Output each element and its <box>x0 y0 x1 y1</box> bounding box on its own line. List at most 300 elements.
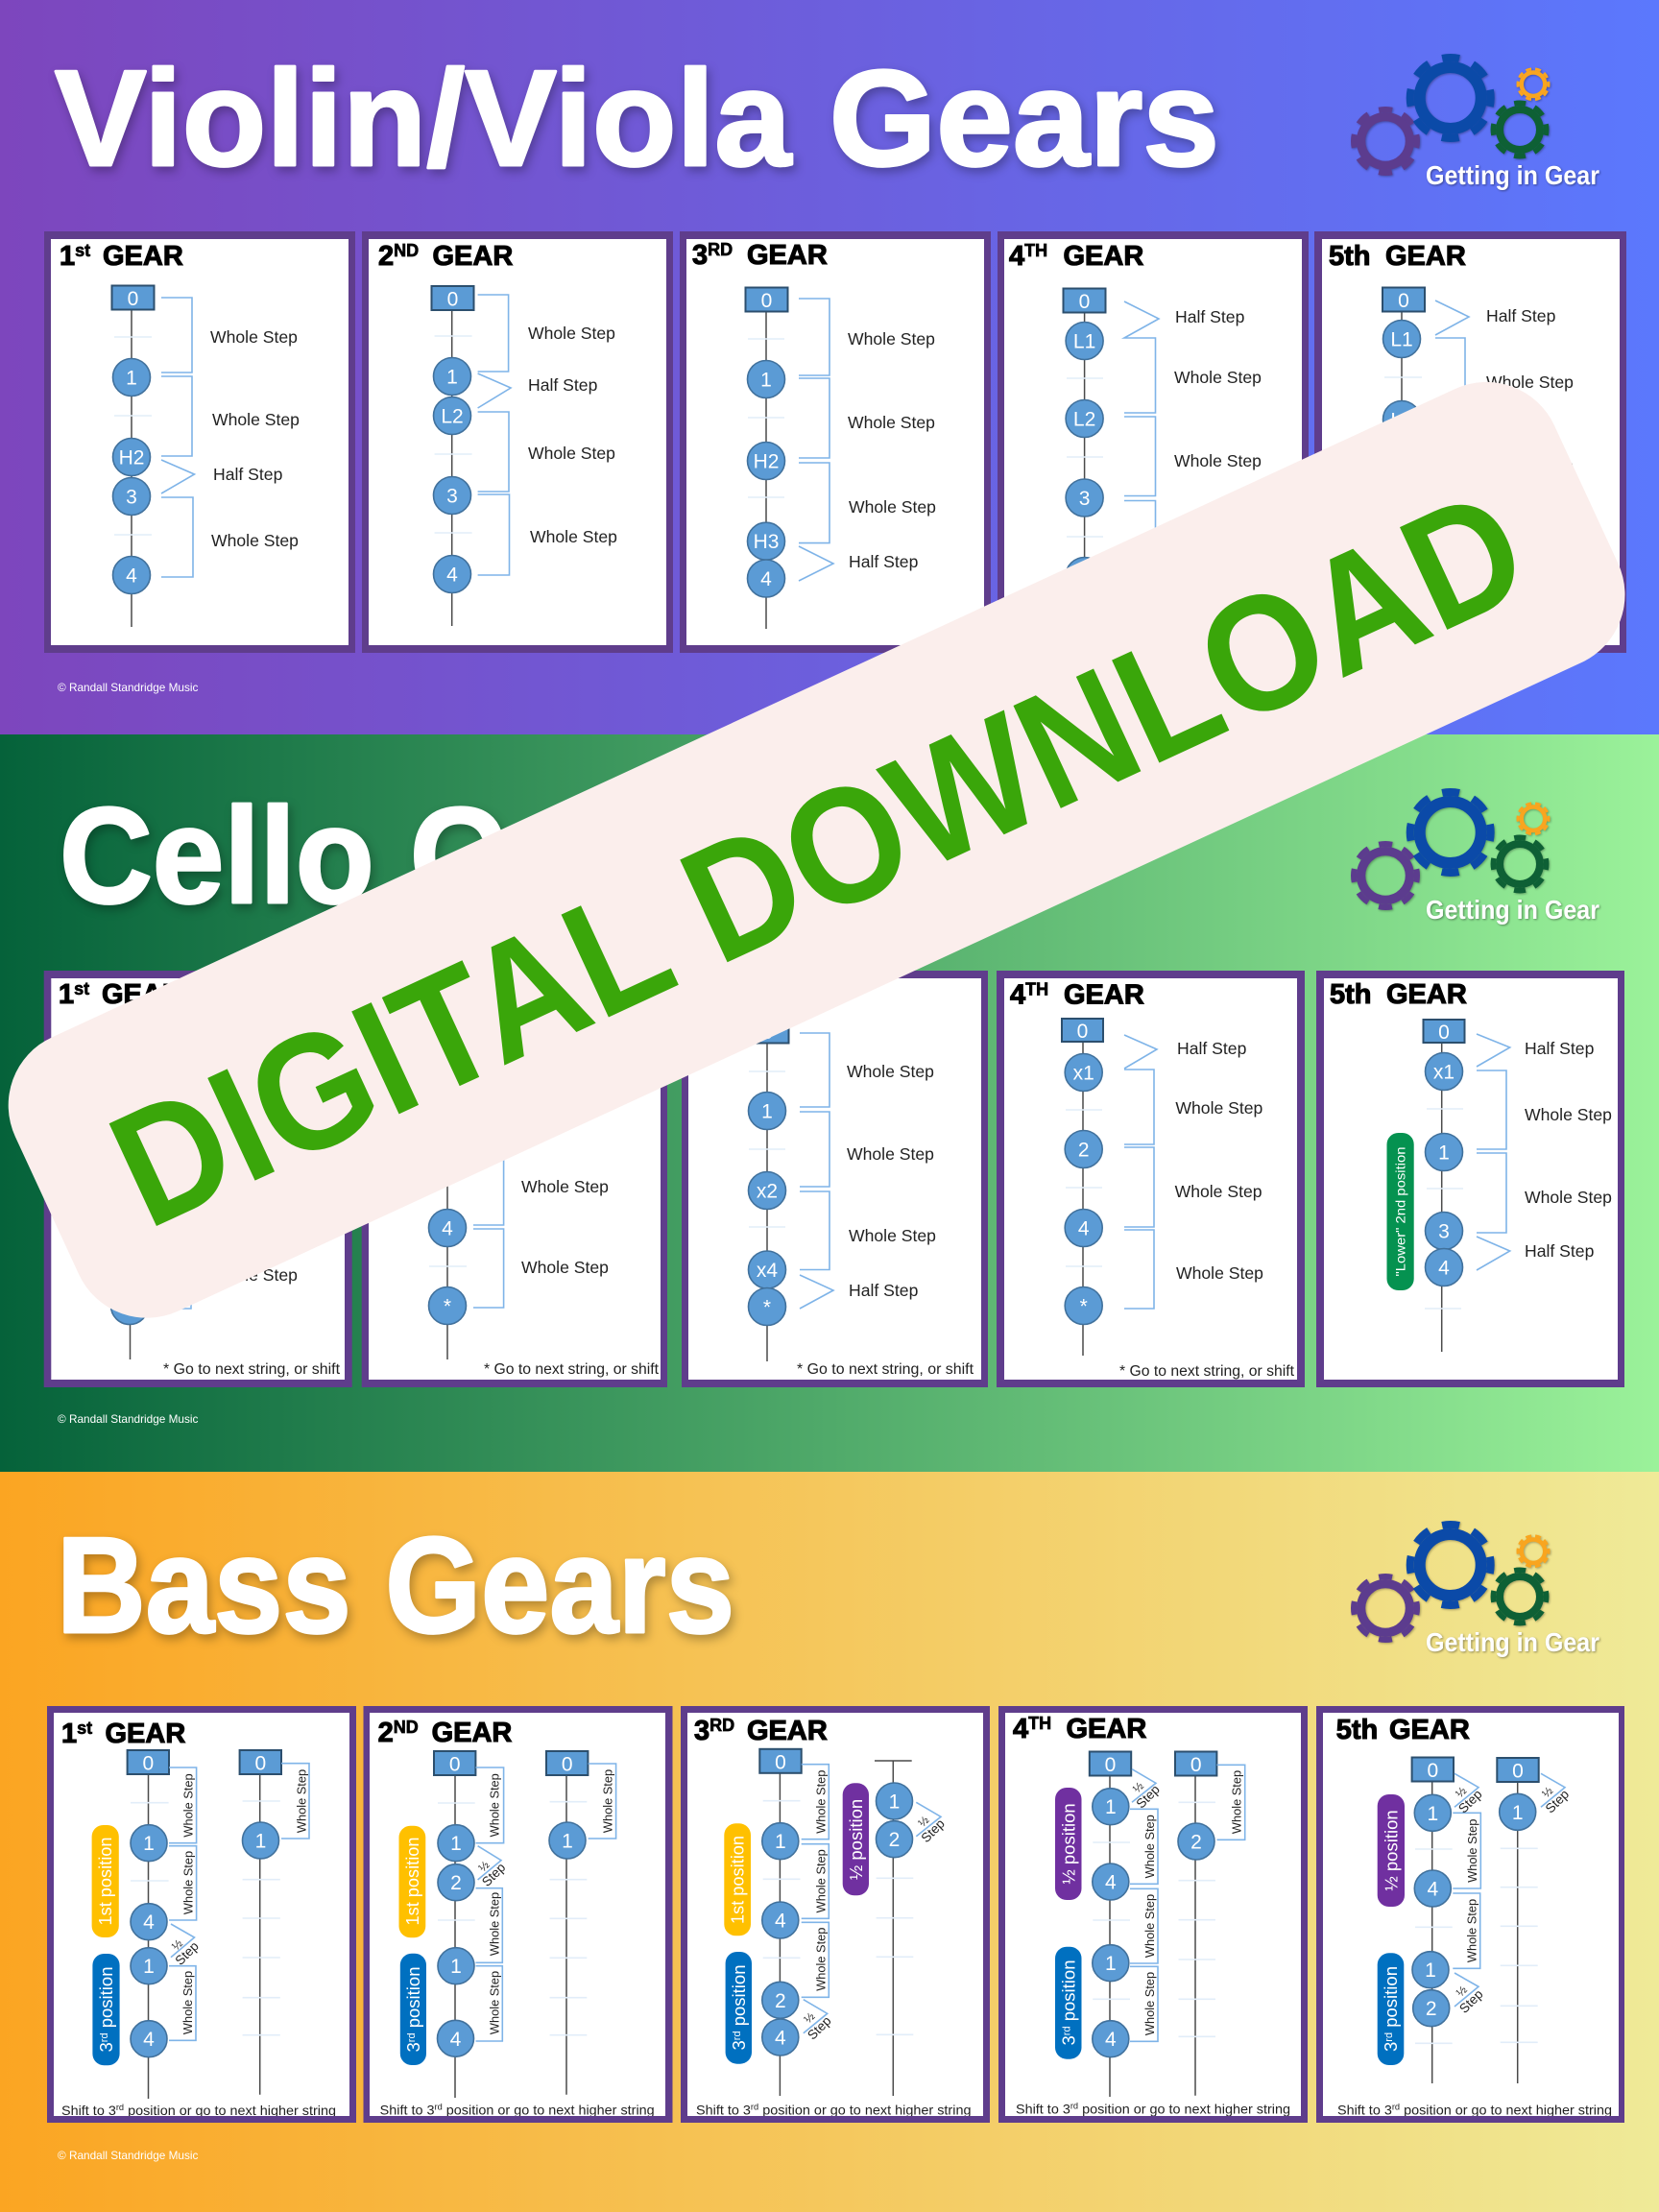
step labels: Whole Step <box>1176 1263 1263 1283</box>
right step label: Whole Step <box>1230 1770 1244 1834</box>
step labels: Whole Step <box>521 1258 609 1277</box>
string diagram: H2 <box>119 447 144 469</box>
right string diagram: 0 <box>1190 1754 1202 1776</box>
string diagram: 3 <box>1079 488 1090 510</box>
string diagram <box>747 1020 789 1361</box>
left string diagram: 4 <box>1105 2029 1117 2051</box>
step labels: Whole Step <box>1525 1188 1612 1207</box>
left string diagram: 1 <box>450 1833 462 1855</box>
pill: half position <box>1055 1788 1081 1900</box>
pill: 3rd position: 3 <box>403 2042 423 2052</box>
right string diagram <box>546 1751 588 2095</box>
heading: 3 <box>694 1716 709 1746</box>
panel: bass 5th gear <box>1316 1706 1624 2123</box>
logo: Getting in Gear (violin): Getting in Gear <box>1426 160 1599 190</box>
panel: violin 2nd gear <box>362 231 673 653</box>
pill: 3rd position <box>1055 1947 1081 2059</box>
pill: 3rd position: position <box>1058 1960 1078 2026</box>
step brackets <box>799 299 833 581</box>
string diagram: * <box>444 1296 451 1317</box>
pill: 3rd position: rd <box>406 2032 418 2042</box>
left step labels: Whole Step <box>1464 1899 1479 1962</box>
heading: 4 <box>1013 1714 1028 1744</box>
right step label: Step <box>1543 1787 1572 1816</box>
string diagram: 3 <box>446 486 458 507</box>
heading: 4 <box>1010 980 1025 1011</box>
section: cello background <box>0 734 1659 1472</box>
left string diagram: 4 <box>775 1911 786 1932</box>
left string diagram: 1 <box>1105 1796 1117 1818</box>
pill: 3rd position: rd <box>732 2031 743 2040</box>
footnote: * Go to next string, or shift <box>797 1361 974 1378</box>
left step labels <box>802 1770 834 2043</box>
left string diagram <box>759 1749 802 2096</box>
string diagram <box>111 1032 148 1359</box>
footer note: Shift to 3 <box>61 2103 114 2118</box>
step labels <box>847 1062 936 1300</box>
string diagram: 0 <box>762 1022 773 1044</box>
heading: GEAR <box>432 1718 512 1748</box>
string diagram: 4 <box>1438 1258 1450 1279</box>
heading: GEAR <box>1386 979 1467 1010</box>
right string diagram: 1 <box>562 1830 573 1853</box>
step labels: Half Step <box>1175 307 1245 326</box>
heading: RD <box>709 1716 734 1735</box>
left step labels <box>169 1773 202 2034</box>
string diagram: 4 <box>442 1217 453 1240</box>
left string diagram: 0 <box>449 1753 461 1776</box>
heading: 5th <box>1330 979 1371 1010</box>
heading: 5th <box>1329 241 1371 272</box>
string diagram: 4 <box>1078 1217 1090 1240</box>
right half-step bracket <box>1541 1773 1565 1807</box>
footer note: rd <box>1070 2102 1078 2111</box>
string diagram: L2 <box>1073 409 1095 430</box>
pill: 3rd position: 3 <box>729 2040 749 2050</box>
left step labels: Whole Step <box>488 1773 502 1837</box>
step labels: Whole Step <box>847 1144 934 1164</box>
step labels: Whole Step <box>528 324 615 343</box>
footnote: * Go to next string, or shift <box>1119 1363 1295 1380</box>
string diagram: 1 <box>1438 1142 1450 1164</box>
logo: Getting in Gear (bass): Getting in Gear <box>1426 1627 1599 1657</box>
step labels: Whole Step <box>1486 373 1574 392</box>
string diagram: * <box>763 1296 771 1319</box>
string diagram: 0 <box>1079 291 1090 313</box>
step brackets <box>1435 301 1469 413</box>
step labels: Whole Step <box>1525 1105 1612 1124</box>
left string diagram: 4 <box>143 2029 155 2051</box>
right string diagram: 0 <box>562 1753 573 1776</box>
right step label: Whole Step <box>601 1769 615 1833</box>
step labels: Half Step <box>1486 306 1556 325</box>
pill: 3rd position: 3 <box>1381 2042 1401 2052</box>
string diagram: * <box>1080 1296 1088 1317</box>
pill: half position: ½ position <box>1058 1803 1078 1885</box>
pill: 3rd position <box>92 1954 120 2065</box>
left step labels <box>476 1773 508 2034</box>
string diagram <box>428 1032 467 1359</box>
left step labels: ½ <box>476 1859 492 1874</box>
panel: cello 4th gear <box>997 971 1305 1387</box>
step brackets <box>1124 301 1159 579</box>
right half-step bracket <box>916 1802 941 1837</box>
footer note: rd <box>116 2103 124 2112</box>
left string diagram <box>434 1751 475 2098</box>
pill: half position: ½ position <box>1381 1810 1401 1891</box>
logo: Getting in Gear (cello): Getting in Gear <box>1426 895 1599 925</box>
footer note: position or go to next higher string <box>124 2103 336 2118</box>
left string diagram <box>1090 1751 1131 2097</box>
footer note: position or go to next higher string <box>758 2103 971 2118</box>
left step labels <box>1453 1784 1486 2016</box>
right bracket <box>281 1764 309 1839</box>
pill: half position <box>843 1783 869 1895</box>
step brackets <box>161 1231 191 1309</box>
copyright: bass: © Randall Standridge Music <box>58 2149 198 2162</box>
heading: st <box>77 1719 92 1738</box>
pill: 3rd position <box>726 1952 752 2064</box>
pill: 3rd position: rd <box>1383 2032 1395 2042</box>
heading: GEAR <box>1064 980 1144 1011</box>
step labels: Whole Step <box>1174 451 1262 470</box>
right string diagram: 0 <box>1512 1761 1524 1782</box>
step labels: Half Step <box>849 552 919 571</box>
heading: 4 <box>1009 241 1024 272</box>
heading: GEAR <box>102 979 182 1010</box>
right string diagram: 1 <box>889 1791 900 1813</box>
step labels: Whole Step <box>1175 1182 1262 1201</box>
heading: GEAR <box>103 241 183 272</box>
step labels: Whole Step <box>1486 456 1574 475</box>
left step labels: Step <box>172 1938 202 1968</box>
heading: GEAR <box>432 241 513 272</box>
right string diagram: 1 <box>1512 1802 1524 1824</box>
step labels: Whole Step <box>1174 368 1262 387</box>
left step labels: Step <box>479 1860 508 1889</box>
left step labels: Whole Step <box>813 1849 828 1912</box>
step labels <box>1525 1039 1612 1261</box>
left step labels: ½ <box>1454 1984 1470 1999</box>
heading: GEAR <box>1066 1714 1146 1744</box>
pill: 3rd position: position <box>1381 1966 1401 2032</box>
left string diagram: 1 <box>1105 1953 1117 1975</box>
left step labels: Whole Step <box>487 1971 501 2034</box>
step labels <box>1174 307 1262 551</box>
right step label: Whole Step <box>294 1769 309 1833</box>
pill: 3rd position: 3 <box>1058 2035 1078 2045</box>
heading: GEAR <box>106 1719 185 1749</box>
string diagram: 0 <box>1438 1022 1450 1044</box>
string diagram <box>1064 288 1106 629</box>
left string diagram: 2 <box>1426 1998 1437 2020</box>
string diagram: 4 <box>126 565 137 588</box>
left brackets <box>1453 1773 1480 2007</box>
string diagram: 1 <box>761 1100 773 1123</box>
logo: Getting in Gear (violin) <box>1354 58 1599 190</box>
string diagram: L1 <box>1073 330 1095 353</box>
section: bass background <box>0 1472 1659 2212</box>
step labels: Half Step <box>213 465 283 484</box>
string diagram: L2 <box>1390 409 1413 432</box>
left step labels: ½ <box>1453 1784 1469 1800</box>
step brackets <box>1477 1034 1510 1270</box>
pill: 3rd position: rd <box>99 2032 110 2042</box>
left step labels: Step <box>1133 1782 1163 1812</box>
string diagram: * <box>126 1296 133 1317</box>
left step labels: Step <box>1455 1787 1485 1816</box>
step labels: Whole Step <box>1174 532 1262 551</box>
string diagram: 0 <box>1077 1021 1088 1043</box>
left step labels: ½ <box>169 1936 185 1953</box>
title: Bass Gears: Bass Gears <box>57 1509 734 1662</box>
right string diagram <box>1175 1751 1216 2096</box>
left string diagram: 1 <box>1425 1960 1436 1982</box>
right string diagram <box>875 1761 913 2096</box>
step labels <box>528 324 617 546</box>
heading: TH <box>1025 980 1048 999</box>
right string diagram: 0 <box>254 1753 266 1774</box>
left step labels: Step <box>805 2013 834 2043</box>
panel: cello 3rd gear <box>682 971 988 1387</box>
step labels: Whole Step <box>847 1062 934 1081</box>
left step labels: Whole Step <box>487 1892 501 1956</box>
left step labels: Whole Step <box>181 1773 196 1838</box>
right bracket <box>589 1764 616 1839</box>
string diagram: x2 <box>757 1181 778 1202</box>
footer note: Shift to 3 <box>1337 2103 1390 2118</box>
footer note: Shift to 3 <box>696 2103 749 2118</box>
panel: violin 1st gear <box>44 231 355 653</box>
heading: TH <box>1024 241 1047 260</box>
heading: st <box>74 979 89 998</box>
left step labels: Whole Step <box>180 1971 195 2034</box>
string diagram: 0 <box>1398 290 1409 312</box>
left string diagram: 2 <box>450 1872 462 1894</box>
left string diagram: 1 <box>143 1956 155 1978</box>
left step labels: Whole Step <box>1142 1972 1157 2035</box>
left string diagram: 0 <box>1105 1754 1116 1776</box>
string diagram: 4 <box>446 565 458 586</box>
step labels: Half Step <box>1177 1039 1247 1058</box>
logo: Getting in Gear (cello) <box>1354 792 1599 925</box>
string diagram: x4 <box>757 1260 778 1282</box>
step labels <box>848 329 936 571</box>
step labels: Half Step <box>528 375 598 395</box>
step labels: Whole Step <box>521 1177 609 1196</box>
right string diagram <box>1497 1758 1539 2083</box>
right string diagram: 1 <box>255 1830 266 1853</box>
heading: st <box>75 241 90 260</box>
string diagram: 3 <box>126 486 137 509</box>
string diagram: x1 <box>1433 1062 1455 1083</box>
heading: TH <box>1028 1714 1051 1733</box>
pill: 1st position: 1st position <box>402 1838 422 1926</box>
step brackets <box>1124 1035 1157 1309</box>
footer note: Shift to 3 <box>380 2103 433 2118</box>
step labels: Whole Step <box>528 444 615 463</box>
footer note: rd <box>1392 2103 1400 2112</box>
left step labels: Whole Step <box>813 1928 828 1991</box>
right step label: ½ <box>916 1814 931 1830</box>
pill: 1st position: 1st position <box>95 1838 115 1926</box>
left brackets <box>802 1765 829 2033</box>
pill: 3rd position: 3 <box>96 2042 116 2052</box>
left string diagram: 4 <box>450 2029 462 2051</box>
left step labels: ½ <box>1130 1779 1146 1795</box>
step labels: Half Step <box>1525 1039 1595 1058</box>
step labels <box>210 327 300 550</box>
right step label: Step <box>918 1816 948 1845</box>
step labels: Half Step <box>849 1281 919 1300</box>
string diagram: 3 <box>1438 1221 1450 1242</box>
step brackets <box>473 1148 504 1308</box>
right string diagram: 2 <box>1190 1832 1202 1853</box>
left step labels: Whole Step <box>181 1851 196 1914</box>
step labels <box>521 1177 609 1277</box>
heading: 2 <box>378 1718 394 1748</box>
left brackets <box>476 1767 504 2041</box>
heading: GEAR <box>1385 241 1466 272</box>
footer note: position or go to next higher string <box>1078 2102 1290 2117</box>
pill: 3rd position: rd <box>1061 2026 1072 2035</box>
heading: 1 <box>59 979 74 1010</box>
right string diagram: 2 <box>889 1829 900 1851</box>
banner text: DIGITAL DOWNLOAD <box>85 454 1551 1262</box>
step labels: Whole Step <box>212 410 300 429</box>
left string diagram: 1 <box>1427 1803 1438 1825</box>
string diagram: 1 <box>760 369 772 392</box>
step brackets <box>161 298 194 577</box>
string diagram: 4 <box>760 568 772 590</box>
string diagram: 1 <box>446 367 458 388</box>
heading: 1 <box>60 241 75 272</box>
pill: 1st position: 1st position <box>728 1836 748 1924</box>
string diagram: 1 <box>126 367 137 390</box>
string diagram: 4 <box>1079 566 1091 588</box>
pill: 1st position <box>399 1826 425 1937</box>
pill: 3rd position: position <box>729 1965 749 2031</box>
string diagram <box>432 286 474 626</box>
pill: half position <box>1378 1794 1405 1907</box>
step labels: Whole Step <box>1175 1098 1263 1118</box>
step labels: Half Step <box>1525 1241 1595 1261</box>
pill: 3rd position <box>400 1954 426 2065</box>
pill: 3rd position: position <box>96 1967 116 2032</box>
left string diagram: 0 <box>1427 1760 1438 1782</box>
string diagram: L1 <box>1390 328 1413 351</box>
step labels: Whole Step <box>210 327 298 347</box>
section: violin/viola background <box>0 0 1659 734</box>
step labels: Whole Step <box>848 329 935 349</box>
left string diagram: 4 <box>775 2028 786 2049</box>
left string diagram: 0 <box>142 1753 154 1774</box>
left string diagram <box>1412 1757 1454 2083</box>
left string diagram: 4 <box>143 1911 155 1934</box>
heading: GEAR <box>747 240 828 271</box>
footer note: position or go to next higher string <box>1400 2103 1612 2118</box>
string diagram: 0 <box>761 290 772 312</box>
right bracket <box>1217 1765 1245 1839</box>
string diagram <box>111 286 154 627</box>
panel: violin 4th gear <box>998 231 1309 653</box>
step labels: Whole Step <box>530 527 617 546</box>
string diagram <box>745 288 787 629</box>
pill: 3rd position <box>1378 1953 1404 2065</box>
heading: ND <box>394 241 419 260</box>
panel: cello 1st gear <box>44 971 352 1387</box>
string diagram: x1 <box>1073 1062 1094 1085</box>
left step labels: Whole Step <box>1465 1819 1479 1883</box>
position pill <box>1386 1133 1414 1290</box>
string diagram <box>1062 1019 1103 1356</box>
pill: 1st position <box>724 1823 751 1936</box>
title: Violin/Viola Gears: Violin/Viola Gears <box>55 42 1219 195</box>
logo: Getting in Gear (bass) <box>1354 1525 1599 1657</box>
heading: 2 <box>378 241 394 272</box>
right step label: ½ <box>1539 1784 1555 1800</box>
heading: 3 <box>692 240 708 271</box>
pill: 3rd position: position <box>403 1967 423 2032</box>
footer note: position or go to next higher string <box>443 2103 655 2118</box>
right string diagram <box>240 1750 281 2095</box>
footnote: * Go to next string, or shift <box>163 1361 341 1378</box>
left step labels: Whole Step <box>1142 1894 1157 1958</box>
step labels: Whole Step <box>848 413 935 432</box>
left brackets <box>169 1767 197 2040</box>
panel: bass 3rd gear <box>681 1706 990 2123</box>
panel: violin 3rd gear <box>680 231 991 653</box>
left string diagram: 4 <box>1105 1872 1117 1893</box>
step brackets <box>478 295 511 575</box>
string diagram: L2 <box>441 405 464 428</box>
panel: cello 5th gear <box>1316 971 1624 1387</box>
left string diagram: 1 <box>775 1831 786 1853</box>
step labels: Whole Step <box>849 497 936 517</box>
step labels: Whole Step <box>211 531 299 550</box>
left step labels <box>1130 1779 1163 2035</box>
heading: ND <box>394 1718 419 1737</box>
panel: violin 5th gear <box>1314 231 1626 653</box>
panel: bass 2nd gear <box>363 1706 672 2123</box>
heading: GEAR <box>747 1716 828 1746</box>
heading: GEAR <box>1064 241 1143 272</box>
left string diagram: 1 <box>143 1833 155 1855</box>
footer note: rd <box>751 2103 758 2112</box>
copyright: cello: © Randall Standridge Music <box>58 1412 198 1426</box>
panel: bass 1st gear <box>47 1706 356 2123</box>
step brackets <box>800 1033 833 1309</box>
title: Cello Gears: Cello Gears <box>60 780 775 932</box>
left string diagram: 4 <box>1427 1878 1438 1901</box>
panel: bass 4th gear <box>998 1706 1308 2123</box>
step labels <box>1175 1039 1263 1283</box>
step label: Whole Step <box>210 1265 298 1285</box>
string diagram: 0 <box>128 288 138 310</box>
heading: 5th <box>1336 1715 1378 1745</box>
string diagram: H2 <box>754 451 779 472</box>
left string diagram: 1 <box>450 1956 462 1978</box>
left string diagram: 2 <box>775 1990 786 2012</box>
left step labels: Whole Step <box>813 1770 828 1834</box>
string diagram: 0 <box>447 288 458 311</box>
left string diagram: 0 <box>775 1751 786 1773</box>
left step labels: ½ <box>802 2009 817 2026</box>
heading: 1 <box>61 1719 77 1749</box>
string diagram: H3 <box>754 531 779 553</box>
copyright: violin: © Randall Standridge Music <box>58 681 198 694</box>
footnote: * Go to next string, or shift <box>484 1361 660 1378</box>
